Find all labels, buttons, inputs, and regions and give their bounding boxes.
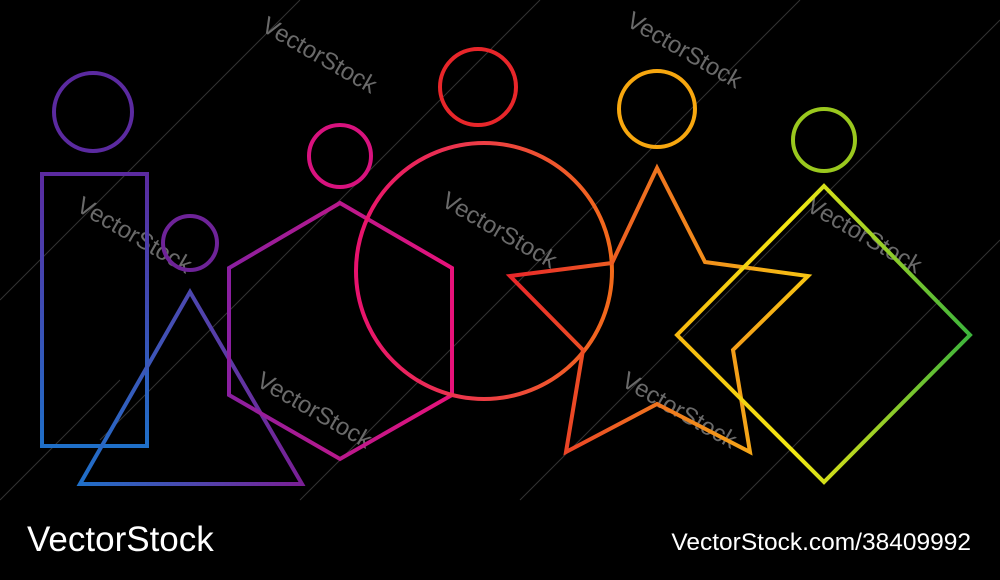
shape: big circle <box>356 143 612 399</box>
shape: hexagon <box>229 203 452 459</box>
head: orange circle <box>619 71 695 147</box>
infographic canvas: VectorStock <box>72 192 197 280</box>
infographic canvas: VectorStock <box>437 187 562 275</box>
infographic canvas: VectorStock <box>617 367 742 455</box>
footer: brand: VectorStock <box>27 520 214 559</box>
infographic canvas: VectorStock <box>802 192 927 280</box>
shape: rectangle <box>42 174 147 446</box>
infographic canvas: VectorStock <box>257 12 382 100</box>
head: red circle <box>440 49 516 125</box>
head: yellow-green circle <box>793 109 855 171</box>
head: small purple circle <box>163 216 217 270</box>
shape: triangle <box>80 292 302 484</box>
infographic canvas: VectorStock <box>622 7 747 95</box>
shape: diamond <box>677 186 970 482</box>
infographic canvas: VectorStock <box>252 367 377 455</box>
shape: star <box>510 168 808 452</box>
footer: image id: VectorStock.com/38409992 <box>671 529 971 556</box>
head: blue-purple circle <box>54 73 132 151</box>
head: magenta circle <box>309 125 371 187</box>
